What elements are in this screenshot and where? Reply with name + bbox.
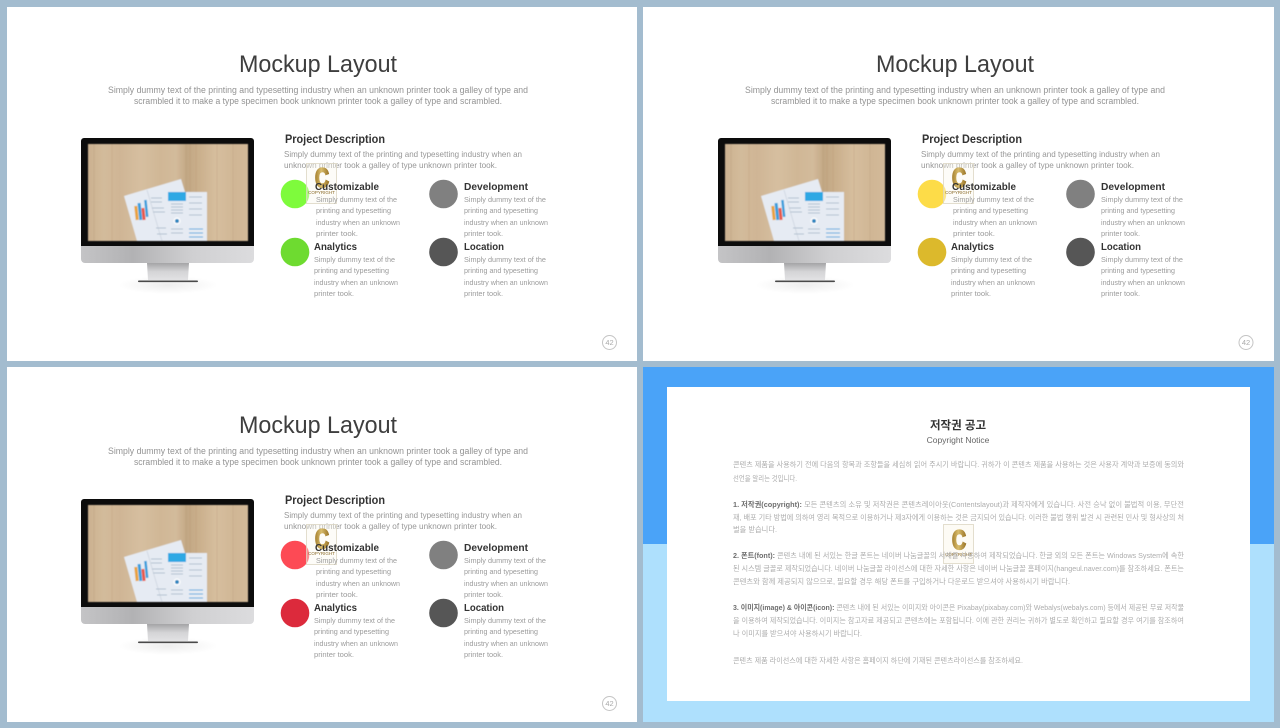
feature: customizable: printer took. <box>953 229 995 238</box>
feature: analytics: Simply dummy text of the <box>314 255 395 264</box>
feature: analytics: industry when an unknown <box>314 278 398 287</box>
icon: dark circle location <box>429 238 458 266</box>
feature: location <box>464 241 548 298</box>
feature: analytics: Simply dummy text of the <box>314 616 395 625</box>
feature: analytics: industry when an unknown <box>951 278 1035 287</box>
project description <box>921 134 1160 170</box>
feature: development: industry when an unknown <box>464 579 548 588</box>
page number: 42 <box>605 699 614 708</box>
watermark: C <box>315 524 329 554</box>
feature: location: Location <box>464 241 504 253</box>
panel: red variant slide <box>7 367 637 722</box>
watermark: COPYRIGHT <box>945 190 972 195</box>
feature: location: printer took. <box>464 289 503 298</box>
feature: customizable: printing and typesetting <box>953 206 1028 215</box>
feature: location: industry when an unknown <box>464 639 548 648</box>
notice footer line: 콘텐츠 제품 라이선스에 대한 자세한 사항은 홈페이지 하단에 기재된 콘텐츠라이선스를 참조하세요. <box>733 655 1023 665</box>
feature: location: Location <box>1101 241 1141 253</box>
feature: customizable: Customizable <box>315 181 379 193</box>
feature: analytics: industry when an unknown <box>314 639 398 648</box>
watermark <box>306 163 336 204</box>
icon: red circle customizable <box>281 541 309 569</box>
title: Mockup Layout <box>239 51 397 78</box>
panel: copyright notice slide <box>643 367 1274 722</box>
project description: unknown printer took a galley of type unknown printer took. <box>284 521 497 531</box>
feature: customizable: industry when an unknown <box>953 218 1037 227</box>
feature: analytics <box>314 602 398 659</box>
feature: development: Development <box>464 181 528 193</box>
subtitle: scrambled it to make a type specimen book unknown printer took a galley of type and scrambled. <box>134 457 502 467</box>
notice section 1: copyright: 벌을 받습니다. <box>733 524 777 534</box>
notice section 1: copyright: 재, 배포 기타 방법에 의하여 영리 목적으로 이용하거나 제3자에게 이용하는 것은 금지되어 있습니다. 이러한 불법 행위 발견 시 관련된 민사 및 형사상의 처 <box>733 512 1184 522</box>
feature: location <box>1101 241 1185 298</box>
page number <box>602 696 616 710</box>
project description: Project Description <box>285 495 385 507</box>
feature: development <box>464 542 548 599</box>
page number: 42 <box>605 338 614 347</box>
feature: analytics: printer took. <box>951 289 991 298</box>
project description: Simply dummy text of the printing and typesetting industry when an <box>921 149 1160 159</box>
page number <box>1239 336 1253 350</box>
feature: development: printing and typesetting <box>464 206 538 215</box>
feature: analytics: Analytics <box>314 241 357 253</box>
notice intro: 콘텐츠 제품을 사용하기 전에 다음의 항목과 조항들을 세심히 읽어 주시기 바랍니다. 귀하가 이 콘텐츠 제품을 사용하는 것은 사용자 계약과 보증에 동의와 <box>733 459 1184 469</box>
feature: development: industry when an unknown <box>1101 218 1185 227</box>
notice section 3: image and icon <box>733 602 1184 638</box>
project description: unknown printer took a galley of type unknown printer took. <box>284 160 497 170</box>
feature: analytics: Simply dummy text of the <box>951 255 1032 264</box>
icon: green circle customizable <box>281 180 309 208</box>
feature: location: printing and typesetting <box>464 627 538 636</box>
notice section 1: copyright <box>733 499 1184 534</box>
notice section 1: copyright: 1. 저작권(copyright): 모든 콘텐츠의 소유 및 저작권은 콘텐츠레이아웃(Contentslayout)과 제작자에게 있습니다. 사전 승낙 없이 불법적 이용, 무단전 <box>733 499 1184 509</box>
feature: customizable: Simply dummy text of the <box>953 195 1034 204</box>
panel: green variant slide <box>7 7 637 361</box>
feature: location: industry when an unknown <box>1101 278 1185 287</box>
feature: customizable: Simply dummy text of the <box>316 195 397 204</box>
feature: customizable <box>952 181 1037 238</box>
watermark: COPYRIGHT <box>945 552 972 557</box>
feature: development: Development <box>1101 181 1165 193</box>
subtitle: Simply dummy text of the printing and typesetting industry when an unknown printer took a galley of type and <box>745 85 1165 95</box>
feature: customizable <box>315 181 400 238</box>
page number <box>602 336 616 350</box>
watermark: C <box>952 525 966 555</box>
feature: development: printer took. <box>464 229 503 238</box>
watermark: C <box>952 163 966 193</box>
feature: development: printing and typesetting <box>464 567 538 576</box>
watermark: COPYRIGHT <box>308 551 335 556</box>
project description: Project Description <box>922 134 1022 146</box>
notice intro: 선언을 알리는 것입니다. <box>733 473 797 483</box>
feature: location: printer took. <box>464 650 503 659</box>
notice section 2: font: 된 시스템 글꼴로 제작되었습니다. 네이버 나눔글꼴 라이선스에 대한 자세한 사항은 네이버 나눔글꼴 홈페이지(hangeul.naver.com)를 참조하세요. 폰트는 <box>733 563 1184 573</box>
panel: yellow variant slide <box>643 7 1274 361</box>
feature: customizable <box>315 542 400 599</box>
title: Mockup Layout <box>239 412 397 439</box>
icon: dark circle location <box>1066 238 1095 266</box>
page number: 42 <box>1242 338 1250 347</box>
project description: Simply dummy text of the printing and typesetting industry when an <box>284 510 522 520</box>
subtitle: scrambled it to make a type specimen book unknown printer took a galley of type and scrambled. <box>134 96 502 106</box>
notice title: 저작권 공고 <box>930 418 986 432</box>
subtitle: Simply dummy text of the printing and typesetting industry when an unknown printer took a galley of type and <box>108 446 528 456</box>
feature: location: printing and typesetting <box>464 266 538 275</box>
notice section 3: image and icon: 나 이미지를 받으셔야 사용하시기 바랍니다. <box>733 628 862 638</box>
feature: location <box>464 602 548 659</box>
notice section 3: image and icon: 을 이용하여 제작되었습니다. 이미지는 참고자료 제공되고 콘텐츠에는 포함됩니다. 이에 관한 권리는 귀하가 별도로 확인하고 필요할 경우 여기를 참조하여 <box>733 615 1184 625</box>
feature: analytics: printer took. <box>314 289 354 298</box>
icon: yellow circle customizable <box>918 180 946 208</box>
feature: development: printer took. <box>1101 229 1140 238</box>
feature: customizable: printing and typesetting <box>316 206 391 215</box>
title: Mockup Layout <box>876 51 1034 78</box>
feature: customizable: printer took. <box>316 229 358 238</box>
feature: development <box>464 181 548 238</box>
icon: green circle analytics <box>281 238 309 266</box>
project description <box>284 495 522 531</box>
subtitle: Simply dummy text of the printing and typesetting industry when an unknown printer took a galley of type and <box>108 85 528 95</box>
icon: dark circle location <box>429 599 458 627</box>
feature: location: printer took. <box>1101 289 1140 298</box>
feature: location: printing and typesetting <box>1101 266 1175 275</box>
notice section 2: font: 콘텐츠와 함께 제공되지 않으므로, 필요할 경우 해당 폰트를 구입하거나 다운로드 받으셔야 사용하시기 바랍니다. <box>733 576 1070 586</box>
notice subtitle: Copyright Notice <box>927 435 990 445</box>
feature: customizable: Customizable <box>315 542 379 554</box>
feature: location: Simply dummy text of the <box>464 616 546 625</box>
subtitle <box>108 85 528 106</box>
feature: development: Development <box>464 542 528 554</box>
icon: gray circle development <box>1066 180 1095 208</box>
feature: customizable: industry when an unknown <box>316 579 400 588</box>
feature: development: Simply dummy text of the <box>464 556 546 565</box>
project description: unknown printer took a galley of type unknown printer took. <box>921 160 1134 170</box>
feature: analytics <box>314 241 398 298</box>
feature: analytics: printing and typesetting <box>314 266 389 275</box>
subtitle <box>108 446 528 467</box>
feature: location: Simply dummy text of the <box>464 255 546 264</box>
feature: development: printing and typesetting <box>1101 206 1175 215</box>
watermark: C <box>315 163 329 193</box>
feature: location: industry when an unknown <box>464 278 548 287</box>
project description: Simply dummy text of the printing and typesetting industry when an <box>284 149 522 159</box>
notice section 2: font: 2. 폰트(font): 콘텐츠 내에 된 서있는 한글 폰트는 네이버 나눔글꼴의 서체를 사용하여 제작되었습니다. 한글 외의 모든 폰트는 Windows System에 속한 <box>733 550 1184 560</box>
feature: analytics <box>951 241 1035 298</box>
feature: development: Simply dummy text of the <box>464 195 546 204</box>
watermark: COPYRIGHT <box>308 190 335 195</box>
icon: yellow circle analytics <box>918 238 946 266</box>
icon: gray circle development <box>429 180 458 208</box>
feature: location: Simply dummy text of the <box>1101 255 1183 264</box>
project description: Project Description <box>285 134 385 146</box>
feature: customizable: industry when an unknown <box>316 218 400 227</box>
feature: customizable: Simply dummy text of the <box>316 556 397 565</box>
icon: red circle analytics <box>281 599 309 627</box>
monitor mockup <box>81 499 254 655</box>
feature: development: Simply dummy text of the <box>1101 195 1183 204</box>
monitor mockup <box>718 138 891 294</box>
feature: analytics: Analytics <box>314 602 357 614</box>
feature: analytics: printer took. <box>314 650 354 659</box>
notice section 3: image and icon: 3. 이미지(image) & 아이콘(icon): 콘텐츠 내에 된 서있는 이미지와 아이콘은 Pixabay(pixabay.com)와 Webalys(webalys.com) 등에서 제공된 무료 저작물 <box>733 602 1184 612</box>
subtitle: scrambled it to make a type specimen book unknown printer took a galley of type and scrambled. <box>771 96 1139 106</box>
subtitle <box>745 85 1165 106</box>
feature: analytics: Analytics <box>951 241 994 253</box>
feature: analytics: printing and typesetting <box>951 266 1026 275</box>
feature: development: printer took. <box>464 590 503 599</box>
monitor mockup <box>81 138 254 294</box>
feature: development: industry when an unknown <box>464 218 548 227</box>
notice intro <box>733 459 1184 483</box>
watermark <box>944 163 974 204</box>
watermark <box>944 524 974 564</box>
feature: development <box>1101 181 1185 238</box>
feature: location: Location <box>464 602 504 614</box>
feature: customizable: Customizable <box>952 181 1016 193</box>
feature: analytics: printing and typesetting <box>314 627 389 636</box>
notice section 2: font <box>733 550 1184 586</box>
project description <box>284 134 522 170</box>
watermark <box>306 524 336 564</box>
icon: gray circle development <box>429 541 458 569</box>
feature: customizable: printing and typesetting <box>316 567 391 576</box>
feature: customizable: printer took. <box>316 590 358 599</box>
